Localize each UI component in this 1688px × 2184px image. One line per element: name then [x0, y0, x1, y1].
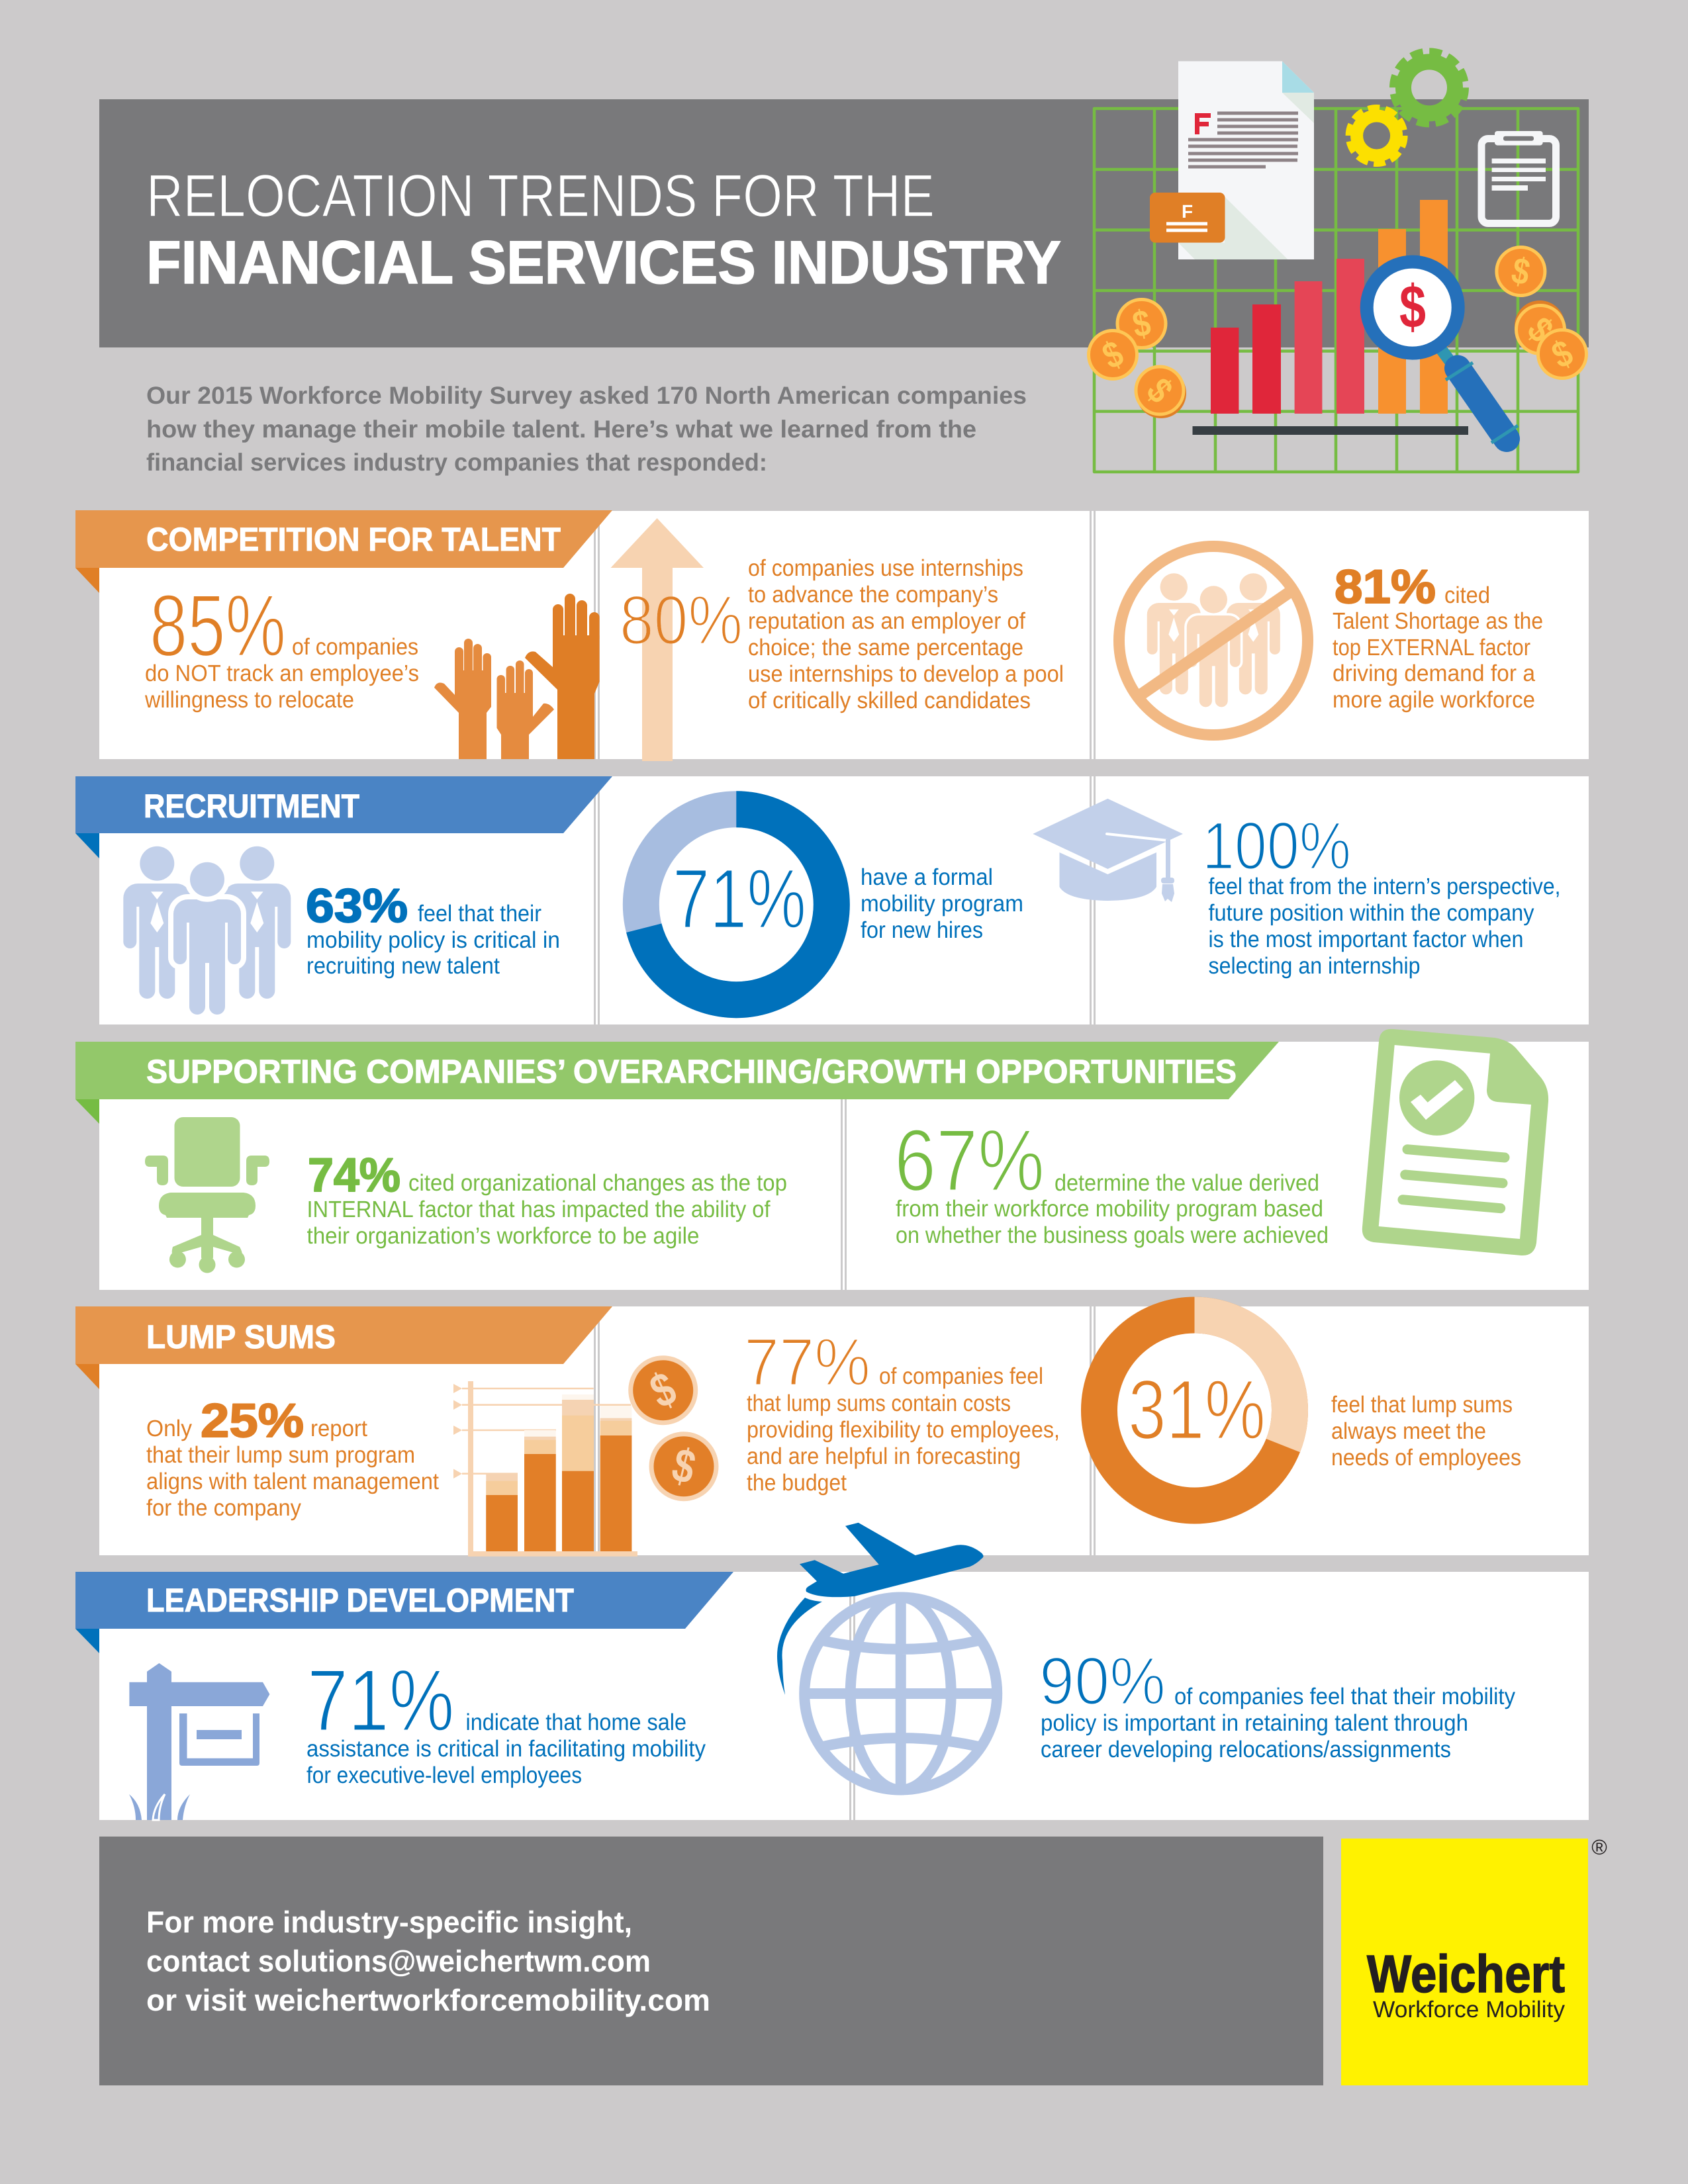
dividers	[594, 776, 1096, 1024]
intro text: how they manage their mobile talent. Here’s what we learned from the	[146, 416, 976, 443]
icon: coins right: $	[1519, 309, 1562, 349]
stat: 77%: that lump sums contain costs	[747, 1390, 1011, 1416]
stat: 67%: 67%	[894, 1112, 1045, 1210]
bar chart: rising bars	[1193, 200, 1468, 435]
stat: 71%: indicate that home sale	[466, 1709, 686, 1735]
title: FINANCIAL SERVICES INDUSTRY	[146, 229, 1061, 296]
logo: Weichert Workforce Mobility: Weichert	[1367, 1944, 1565, 2003]
footer band	[99, 1837, 1323, 2085]
stat: 63%: 63%	[306, 880, 408, 933]
stat: 80%: choice; the same percentage	[748, 635, 1023, 660]
stat: 67%: on whether the business goals were achieved	[896, 1222, 1329, 1248]
text: meet needs of employees: needs of employees	[1331, 1445, 1521, 1471]
ribbon heading	[75, 776, 612, 858]
text: meet needs of employees: always meet the	[1331, 1418, 1486, 1444]
stat: 81%: driving demand for a	[1333, 660, 1536, 686]
logo: Weichert Workforce Mobility: ®	[1591, 1835, 1607, 1859]
icon: green gear	[1393, 51, 1466, 124]
icon: up arrow	[610, 518, 704, 761]
icon: orange tag	[1150, 193, 1225, 243]
stat: 80%: of companies use internships	[748, 555, 1023, 581]
title: RELOCATION TRENDS FOR THE	[146, 163, 935, 230]
ribbon heading	[75, 1042, 1279, 1124]
icon: coins right	[1497, 248, 1586, 379]
stat: 63%: feel that their	[418, 901, 541, 927]
header panel	[99, 51, 1589, 476]
icon: dollar coins: $	[667, 1438, 700, 1494]
stat: 100%	[1202, 808, 1561, 979]
icon: clipboard	[1481, 131, 1556, 224]
stat: 77%: of companies feel	[879, 1363, 1043, 1389]
ribbon heading	[75, 1306, 612, 1389]
icon: raised hands	[434, 594, 600, 759]
ribbon heading	[75, 510, 612, 593]
stat: 25%: for the company	[146, 1495, 301, 1521]
intro text	[146, 382, 1027, 476]
stat: 71%: assistance is critical in facilitating mobility	[306, 1736, 706, 1762]
ribbon heading: LEADERSHIP DEVELOPMENT	[146, 1582, 574, 1619]
stat: 63%: recruiting new talent	[306, 953, 500, 979]
dividers	[849, 1572, 855, 1820]
stat: 81%: top EXTERNAL factor	[1333, 635, 1530, 660]
ribbon heading: LUMP SUMS	[146, 1318, 336, 1355]
panel: recruitment	[75, 776, 1589, 1024]
stat: 90%: of companies feel that their mobility	[1174, 1684, 1515, 1709]
icon: coins left: $	[1096, 332, 1129, 377]
icon: real estate sign	[129, 1663, 269, 1820]
panel background	[99, 1306, 1589, 1555]
logo: Weichert Workforce Mobility	[1341, 1835, 1607, 2085]
panel background	[99, 776, 1589, 1024]
panel: supporting companies	[75, 1029, 1589, 1290]
icon: airplane	[777, 1523, 984, 1695]
stat: 81%: 81%	[1335, 561, 1436, 614]
icon: document	[1178, 61, 1314, 259]
icon: dollar coins	[631, 1358, 716, 1499]
stat: 25%: report	[310, 1416, 367, 1441]
donut chart: 31%	[1099, 1315, 1289, 1506]
stat: 90%: 90%	[1039, 1643, 1166, 1719]
stat: 77%: and are helpful in forecasting	[747, 1443, 1021, 1469]
icon: coins left	[1088, 299, 1186, 418]
stat: 90%	[1039, 1643, 1515, 1762]
stat: 71%: for executive-level employees	[306, 1762, 582, 1788]
icon: magnifying glass: $	[1399, 273, 1426, 341]
icon: office chair	[145, 1117, 269, 1273]
stat: 80%: of critically skilled candidates	[748, 688, 1031, 713]
icon: no people	[1119, 547, 1308, 735]
stat: 85%: 85%	[150, 577, 286, 675]
stat: 90%: policy is important in retaining talent through	[1041, 1710, 1468, 1736]
donut chart: 71%	[641, 809, 831, 1000]
icon: coins left: $	[1129, 301, 1154, 345]
stat: 74%: INTERNAL factor that has impacted the ability of	[307, 1197, 771, 1222]
text: formal mobility program: have a formal	[861, 864, 993, 890]
dividers	[841, 1042, 847, 1290]
stat: 85%: of companies	[292, 634, 418, 660]
stat: 80%: 80%	[620, 582, 743, 659]
dividers	[594, 511, 1096, 759]
bar chart: stacked bars with flags	[453, 1381, 637, 1557]
stat: 25%: that their lump sum program	[146, 1442, 415, 1468]
panel background	[99, 511, 1589, 759]
stat: 90%: career developing relocations/assignments	[1041, 1737, 1451, 1762]
intro text: Our 2015 Workforce Mobility Survey asked 170 North American companies	[146, 382, 1027, 409]
stat: 67%: from their workforce mobility program based	[896, 1196, 1323, 1222]
panel: lump sums	[75, 1306, 1589, 1557]
stat: 100%: feel that from the intern’s perspective,	[1209, 874, 1561, 899]
call to action text	[146, 1905, 710, 2017]
stat: 71%	[306, 1652, 706, 1788]
stat: 77%	[744, 1324, 1060, 1496]
stat: 63%	[306, 880, 560, 979]
stat: 80%: to advance the company’s	[748, 582, 998, 608]
stat: 81%: more agile workforce	[1333, 687, 1535, 713]
stat: 25%: 25%	[201, 1394, 304, 1447]
icon: orange tag: F	[1182, 201, 1193, 222]
donut chart: 71%: 71%	[673, 852, 806, 946]
icon: globe	[804, 1598, 997, 1790]
stat: 77%: 77%	[744, 1324, 870, 1400]
header band	[99, 99, 1589, 347]
text: formal mobility program	[861, 864, 1023, 943]
stat: 81%	[1333, 561, 1543, 713]
stat: 85%: do NOT track an employee’s	[145, 660, 419, 686]
stat: 74%: their organization’s workforce to be agile	[307, 1223, 699, 1249]
panel: competition for talent	[75, 510, 1589, 761]
stat: 25%: aligns with talent management	[146, 1469, 439, 1494]
call to action text: contact solutions@weichertwm.com	[146, 1944, 651, 1978]
panel: leadership development	[75, 1523, 1589, 1820]
icon: magnifying glass	[1367, 262, 1518, 443]
footer panel	[99, 1835, 1607, 2085]
stat: 85%: willingness to relocate	[144, 687, 354, 713]
ribbon heading: COMPETITION FOR TALENT	[146, 521, 561, 558]
icon: three people	[123, 846, 291, 1015]
stat: 100%: is the most important factor when	[1209, 927, 1524, 952]
logo: Weichert Workforce Mobility: Workforce Mobility	[1373, 1997, 1565, 2023]
panel background	[99, 1042, 1589, 1290]
stat: 67%	[894, 1112, 1329, 1248]
stat: 25%: Only	[146, 1416, 192, 1441]
stat: 80%	[620, 555, 1064, 713]
stat: 77%: providing flexibility to employees,	[747, 1417, 1060, 1443]
title	[146, 163, 1061, 296]
ribbon heading	[75, 1572, 733, 1653]
stat: 67%: determine the value derived	[1055, 1170, 1319, 1196]
icon: dollar coins: $	[643, 1362, 684, 1419]
stat: 80%: reputation as an employer of	[748, 608, 1025, 634]
icon: document with check mark	[1362, 1029, 1548, 1255]
text: formal mobility program: for new hires	[861, 917, 983, 943]
dividers	[594, 1306, 1096, 1555]
call to action text: For more industry-specific insight,	[146, 1905, 632, 1939]
donut chart: 31%: 31%	[1128, 1363, 1266, 1457]
stat: 71%: 71%	[307, 1652, 454, 1750]
illustration: finance grid, document, gears, bars and magnifier	[1088, 51, 1586, 472]
ribbon heading: SUPPORTING COMPANIES’ OVERARCHING/GROWTH OPPORTUNITIES	[146, 1053, 1237, 1090]
stat: 85%	[144, 577, 419, 713]
icon: coins right: $	[1508, 249, 1534, 293]
stat: 80%: use internships to develop a pool	[748, 661, 1064, 687]
text: formal mobility program: mobility program	[861, 891, 1023, 917]
stat: 81%: cited	[1444, 582, 1490, 608]
stat: 100%: future position within the company	[1209, 900, 1534, 926]
icon: yellow gear	[1348, 107, 1405, 164]
stat: 100%: 100%	[1202, 808, 1351, 884]
text: meet needs of employees: feel that lump sums	[1331, 1392, 1513, 1418]
stat: 25%	[146, 1394, 439, 1521]
icon: graduation cap	[1033, 799, 1183, 902]
text: meet needs of employees	[1331, 1392, 1521, 1471]
icon: coins left: $	[1139, 370, 1181, 410]
stat: 74%: cited organizational changes as the top	[408, 1170, 787, 1196]
stat: 63%: mobility policy is critical in	[306, 927, 560, 953]
stat: 77%: the budget	[747, 1470, 847, 1496]
icon: coins right: $	[1546, 332, 1579, 377]
intro text: financial services industry companies that responded:	[146, 449, 767, 476]
stat: 74%: 74%	[308, 1149, 400, 1202]
stat: 74%	[307, 1149, 787, 1249]
stat: 81%: Talent Shortage as the	[1333, 608, 1543, 634]
stat: 100%: selecting an internship	[1209, 953, 1421, 979]
call to action text: or visit weichertworkforcemobility.com	[146, 1983, 710, 2017]
icon: green grid	[1094, 109, 1578, 472]
ribbon heading: RECRUITMENT	[144, 788, 359, 825]
panel background	[99, 1572, 1589, 1820]
